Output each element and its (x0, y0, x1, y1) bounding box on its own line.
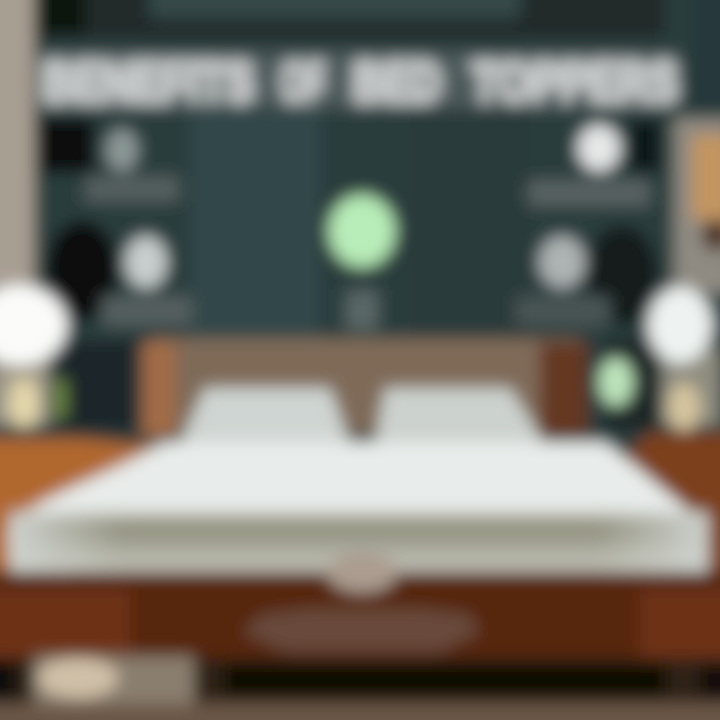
small green icon on right (599, 358, 633, 406)
benefit: middle left (102, 236, 192, 326)
benefit: middle right (516, 236, 610, 326)
benefit: top left (85, 129, 179, 202)
mattress topper (8, 442, 708, 572)
pillows (180, 388, 545, 445)
bed footboard (0, 570, 720, 665)
title (40, 50, 680, 113)
title: OF (281, 50, 325, 113)
title: BENEFITS (42, 50, 254, 113)
folded item at foot of bed (327, 553, 397, 593)
title: BED (353, 50, 441, 113)
bed headboard (142, 338, 588, 437)
benefit: centre green circle (329, 195, 395, 330)
right lamp (648, 287, 720, 431)
floor and under-bed shadow (0, 658, 720, 720)
wall art on the right (674, 118, 720, 293)
left lamp (0, 285, 67, 428)
dark shadows beside the icons (38, 118, 660, 430)
rug (34, 656, 194, 704)
nightstands (0, 432, 720, 580)
tray on bench (242, 608, 480, 652)
benefit: top right (528, 125, 650, 206)
